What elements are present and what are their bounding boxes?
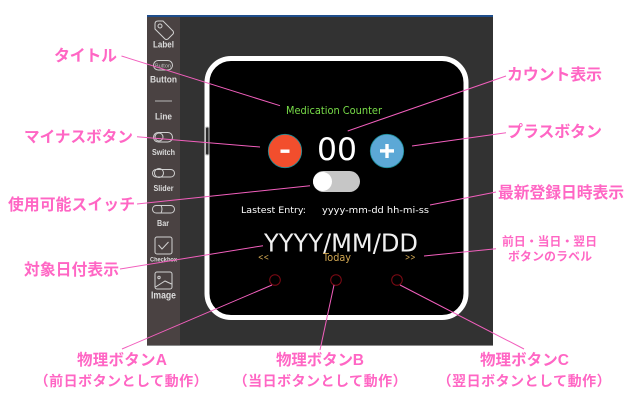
panel: widget sidebar bbox=[147, 17, 180, 345]
icon: switch bbox=[154, 132, 172, 142]
physical button A indicator bbox=[270, 275, 280, 285]
callout leader lines bbox=[120, 56, 524, 350]
label: physical button C bbox=[438, 351, 611, 389]
title text: Medication Counter bbox=[286, 105, 383, 117]
label: day button labels: 前日・当日・翌日 bbox=[502, 234, 597, 248]
sidebar text: Button: Button bbox=[150, 74, 177, 86]
previous day label: << bbox=[258, 253, 269, 263]
label: physical button B: 物理ボタンB bbox=[276, 351, 364, 369]
label: count display: カウント表示 bbox=[507, 66, 602, 84]
icon: line bbox=[155, 100, 172, 102]
label: physical button A: 物理ボタンA bbox=[77, 351, 167, 369]
icon: button: Button bbox=[155, 64, 171, 70]
icon: slider bbox=[152, 168, 174, 178]
label: physical button A bbox=[35, 351, 208, 389]
count display: 00 bbox=[317, 132, 357, 168]
last entry value: yyyy-mm-dd hh-mi-ss bbox=[322, 206, 429, 216]
minus button bbox=[268, 134, 302, 168]
sidebar text: Checkbox: Checkbox bbox=[150, 256, 177, 264]
sidebar text: Image: Image bbox=[151, 290, 176, 302]
side button outline bbox=[206, 127, 209, 155]
label: physical button A: （前日ボタンとして動作） bbox=[35, 373, 208, 389]
panel: watch screen bbox=[206, 58, 466, 318]
label: physical button C: （翌日ボタンとして動作） bbox=[438, 373, 611, 389]
last entry label: Lastest Entry: bbox=[241, 206, 306, 216]
icon: checkbox bbox=[155, 237, 172, 254]
sidebar text: Switch: Switch bbox=[152, 147, 175, 157]
label: physical button B: （当日ボタンとして動作） bbox=[234, 373, 407, 389]
icon: label tag bbox=[155, 21, 174, 40]
icon: bar bbox=[152, 206, 174, 213]
label: plus button: プラスボタン bbox=[507, 123, 602, 141]
next day label: >> bbox=[405, 253, 416, 263]
label: physical button B bbox=[234, 351, 407, 389]
sidebar text: Line: Line bbox=[155, 112, 172, 122]
physical button C indicator bbox=[392, 275, 402, 285]
sidebar text: Slider: Slider bbox=[154, 183, 174, 193]
label: target date: 対象日付表示 bbox=[24, 260, 119, 279]
today label: Today bbox=[322, 252, 351, 264]
target date display: YYYY/MM/DD bbox=[263, 228, 418, 258]
icon: button bbox=[154, 60, 172, 70]
label: physical button C: 物理ボタンC bbox=[480, 351, 569, 369]
label: title: タイトル bbox=[54, 47, 117, 65]
physical button B indicator bbox=[331, 275, 341, 285]
sidebar text: Bar: Bar bbox=[157, 218, 170, 228]
sidebar text: Label: Label bbox=[153, 40, 174, 50]
label: last entry: 最新登録日時表示 bbox=[498, 183, 624, 202]
label: day button labels bbox=[502, 234, 597, 264]
label: minus button: マイナスボタン bbox=[24, 128, 133, 146]
icon: image bbox=[155, 272, 172, 289]
editor background panel bbox=[147, 15, 493, 346]
label: day button labels: ボタンのラベル bbox=[508, 250, 592, 264]
label: enable switch: 使用可能スイッチ bbox=[8, 195, 135, 214]
enable switch bbox=[313, 171, 360, 192]
plus button bbox=[370, 134, 404, 168]
